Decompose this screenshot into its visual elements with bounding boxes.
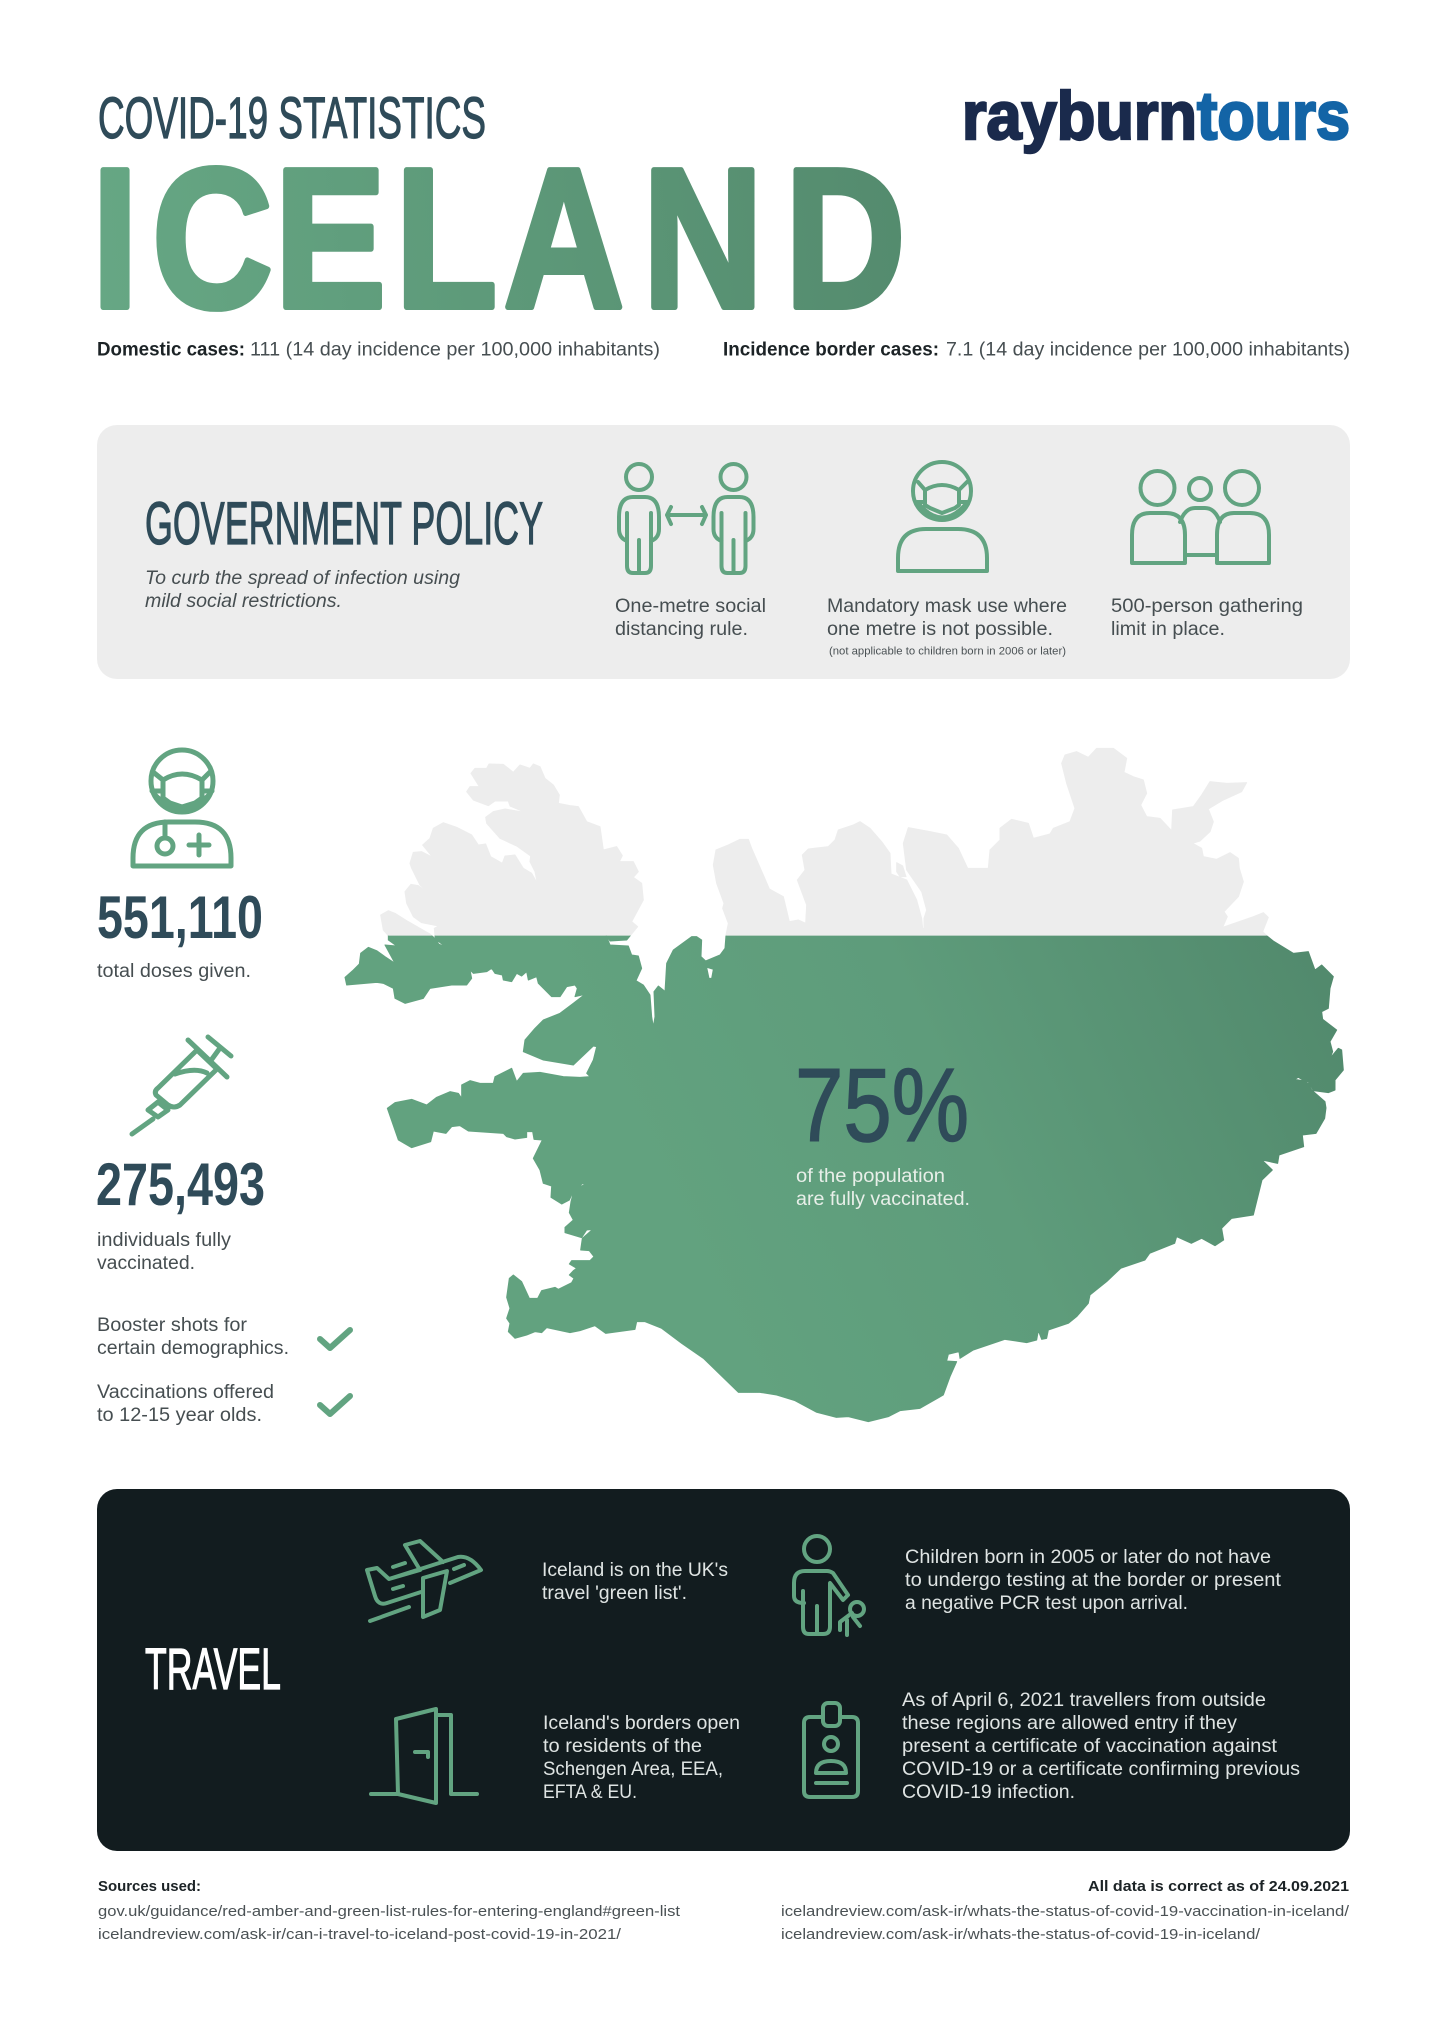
stat: domestic cases bbox=[97, 340, 660, 360]
stat: incidence border cases: Incidence border cases: bbox=[723, 340, 939, 360]
sources left: gov.uk/guidance/red-amber-and-green-list-rules-for-entering-england#green-list bbox=[98, 1903, 681, 1920]
text: green list: travel 'green list'. bbox=[542, 1583, 687, 1604]
stat: individuals vaccinated bbox=[96, 1151, 265, 1274]
text: fully vaccinated: of the population bbox=[796, 1166, 945, 1187]
text: borders: EFTA & EU. bbox=[543, 1782, 637, 1803]
icon: plane bbox=[367, 1541, 481, 1621]
text: children: to undergo testing at the border or present bbox=[905, 1570, 1282, 1591]
caption: mask rule bbox=[827, 596, 1067, 658]
caption: distancing rule bbox=[615, 596, 766, 640]
sources right: icelandreview.com/ask-ir/whats-the-status-of-covid-19-vaccination-in-iceland/ bbox=[781, 1903, 1350, 1920]
text: policy description bbox=[145, 568, 460, 612]
icon: group of people bbox=[1132, 471, 1269, 563]
text: children: Children born in 2005 or later do not have bbox=[905, 1547, 1271, 1568]
stat: domestic cases: Domestic cases: bbox=[97, 340, 245, 360]
stat: incidence border cases: 7.1 (14 day incidence per 100,000 inhabitants) bbox=[946, 340, 1350, 360]
text: green list bbox=[542, 1560, 728, 1604]
checklist: booster shots: certain demographics. bbox=[97, 1338, 289, 1359]
icon: door bbox=[371, 1709, 477, 1803]
text: fully vaccinated bbox=[796, 1166, 970, 1210]
caption: distancing rule: distancing rule. bbox=[615, 619, 748, 640]
stat: individuals vaccinated: vaccinated. bbox=[97, 1253, 195, 1274]
stat: 75 percent: 75% bbox=[795, 1048, 969, 1164]
caption: mask rule: Mandatory mask use where bbox=[827, 596, 1067, 617]
icon: syringe bbox=[132, 1037, 231, 1134]
subtitle: COVID-19 Statistics: COVID-19 STATISTICS bbox=[98, 86, 486, 151]
text: borders: to residents of the bbox=[543, 1736, 702, 1757]
sources left: icelandreview.com/ask-ir/can-i-travel-to-iceland-post-covid-19-in-2021/ bbox=[98, 1926, 622, 1943]
icon: doctor bbox=[133, 750, 231, 866]
checklist: booster shots bbox=[97, 1315, 350, 1359]
logo: rayburntours: tours bbox=[1197, 78, 1350, 154]
text: certificate: COVID-19 or a certificate confirming previous bbox=[902, 1759, 1300, 1780]
logo: rayburntours: rayburn bbox=[962, 78, 1197, 154]
text: certificate: COVID-19 infection. bbox=[902, 1782, 1075, 1803]
text: certificate: these regions are allowed entry if they bbox=[902, 1713, 1238, 1734]
heading: government policy: GOVERNMENT POLICY bbox=[145, 490, 543, 557]
sources left bbox=[98, 1878, 681, 1943]
icon: adult and child bbox=[794, 1536, 864, 1635]
text: certificate bbox=[902, 1690, 1300, 1803]
heading: travel: TRAVEL bbox=[145, 1637, 281, 1702]
checklist: vaccinations for 12-15: Vaccinations offered bbox=[97, 1382, 274, 1403]
stat: domestic cases: 111 (14 day incidence per 100,000 inhabitants) bbox=[250, 340, 660, 360]
checklist: vaccinations for 12-15: to 12-15 year olds. bbox=[97, 1405, 262, 1426]
caption: gathering limit: limit in place. bbox=[1111, 619, 1225, 640]
text: certificate: present a certificate of vaccination against bbox=[902, 1736, 1278, 1757]
caption: mask rule: one metre is not possible. bbox=[827, 619, 1053, 640]
title: Iceland: ICELAND bbox=[92, 127, 906, 349]
checklist: vaccinations for 12-15 bbox=[97, 1382, 350, 1426]
text: certificate: As of April 6, 2021 travellers from outside bbox=[902, 1690, 1266, 1711]
icon: ID badge bbox=[804, 1703, 858, 1797]
stat: total doses bbox=[97, 884, 263, 982]
text: borders: Iceland's borders open bbox=[543, 1713, 740, 1734]
icon: check mark bbox=[320, 1396, 350, 1414]
icon: person with mask bbox=[898, 462, 987, 571]
text: children bbox=[905, 1547, 1282, 1614]
caption: mask rule: (not applicable to children born in 2006 or later) bbox=[829, 646, 1066, 658]
text: borders: Schengen Area, EEA, bbox=[543, 1759, 723, 1780]
text: fully vaccinated: are fully vaccinated. bbox=[796, 1189, 970, 1210]
stat: total doses: total doses given. bbox=[97, 961, 251, 982]
icon: social distancing bbox=[619, 464, 754, 573]
stat: total doses: 551,110 bbox=[97, 884, 263, 951]
icon: check mark bbox=[320, 1330, 350, 1348]
checklist: booster shots: Booster shots for bbox=[97, 1315, 248, 1336]
sources right: All data is correct as of 24.09.2021 bbox=[1088, 1878, 1349, 1895]
sources left: Sources used: bbox=[98, 1878, 201, 1895]
caption: gathering limit: 500-person gathering bbox=[1111, 596, 1303, 617]
text: green list: Iceland is on the UK's bbox=[542, 1560, 728, 1581]
sources right: icelandreview.com/ask-ir/whats-the-status-of-covid-19-in-iceland/ bbox=[781, 1926, 1261, 1943]
text: borders bbox=[543, 1713, 740, 1803]
caption: gathering limit bbox=[1111, 596, 1303, 640]
text: policy description: To curb the spread of infection using bbox=[145, 568, 460, 589]
stat: individuals vaccinated: individuals fully bbox=[97, 1230, 232, 1251]
panel: government policy bbox=[97, 425, 1350, 679]
text: children: a negative PCR test upon arrival. bbox=[905, 1593, 1188, 1614]
sources right bbox=[781, 1878, 1350, 1943]
text: policy description: mild social restrictions. bbox=[145, 591, 342, 612]
logo: rayburntours bbox=[962, 78, 1350, 154]
stat: incidence border cases bbox=[723, 340, 1350, 360]
caption: distancing rule: One-metre social bbox=[615, 596, 766, 617]
stat: individuals vaccinated: 275,493 bbox=[96, 1151, 265, 1218]
map: Iceland 75 percent filled bbox=[345, 748, 1343, 1422]
panel: travel bbox=[97, 1489, 1350, 1851]
